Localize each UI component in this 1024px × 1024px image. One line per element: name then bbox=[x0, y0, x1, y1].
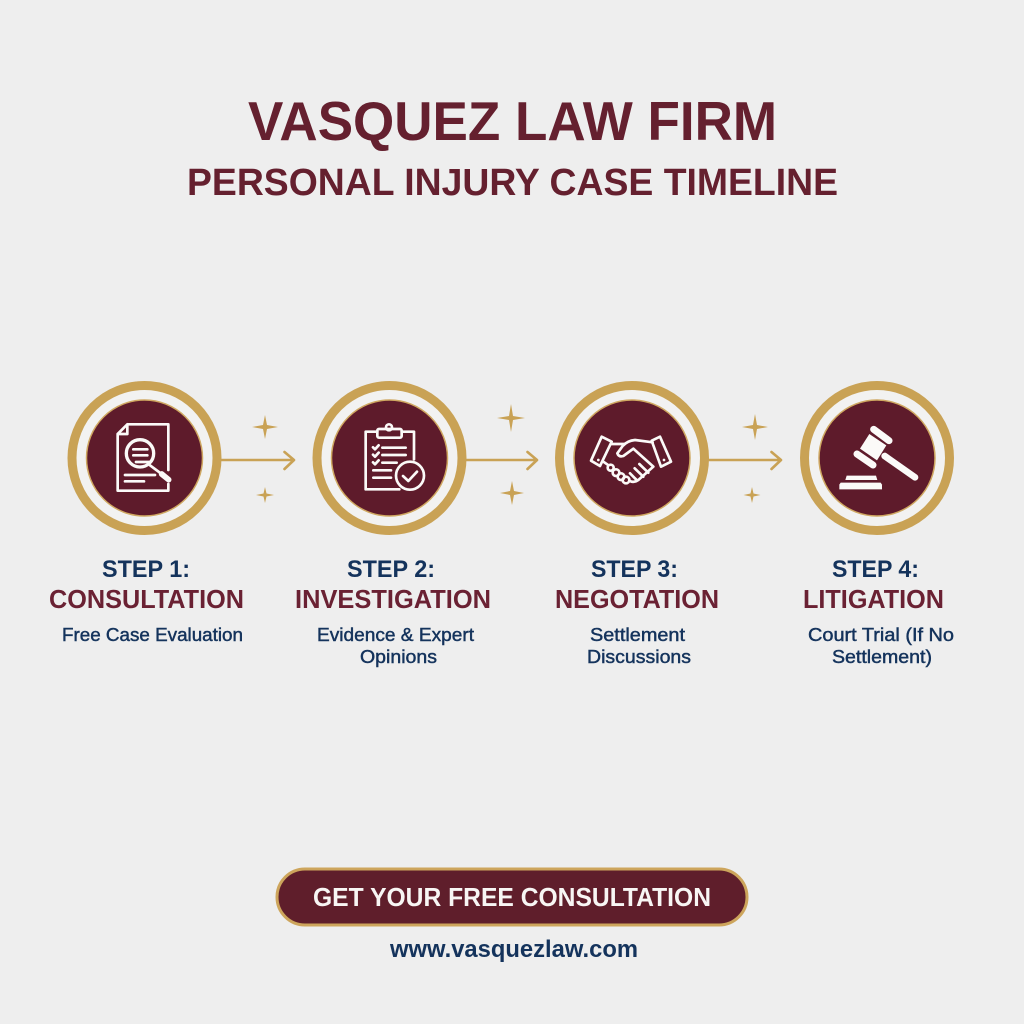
step 2 description: Evidence & Expert bbox=[317, 625, 474, 645]
step 2 disk bbox=[332, 400, 448, 516]
step 1 ring bbox=[72, 386, 217, 530]
icon: gavel bbox=[839, 429, 915, 489]
step 4 name: LITIGATION bbox=[803, 584, 944, 614]
step 3 description bbox=[587, 625, 691, 667]
sparkle 1 top bbox=[252, 415, 278, 439]
step 4 description: Settlement) bbox=[832, 647, 932, 667]
sparkle 2 bottom bbox=[500, 481, 524, 505]
step 3 disk bbox=[574, 400, 690, 516]
step 4 ring bbox=[804, 386, 950, 530]
step 4: litigation bbox=[803, 386, 954, 667]
step 1 label: STEP 1: bbox=[102, 556, 190, 583]
step 1 description: Free Case Evaluation bbox=[62, 625, 243, 645]
step 4 description: Court Trial (If No bbox=[808, 625, 954, 645]
icon: clipboard with checkmark bbox=[366, 424, 424, 490]
step 2: investigation bbox=[295, 386, 491, 667]
step 3 description: Discussions bbox=[587, 647, 691, 667]
step 2 ring bbox=[317, 386, 462, 530]
arrow 1 bbox=[221, 452, 294, 469]
arrow 3 bbox=[708, 452, 781, 469]
sparkle 2 top bbox=[497, 404, 525, 432]
step 3: negotiation bbox=[555, 386, 719, 667]
icon: handshake bbox=[591, 437, 671, 483]
step 3 ring bbox=[560, 386, 704, 530]
step 4 disk bbox=[819, 400, 935, 516]
step 1 name: CONSULTATION bbox=[49, 584, 244, 614]
step 3 label: STEP 3: bbox=[591, 556, 678, 583]
call-to-action button bbox=[277, 869, 747, 925]
subtitle: PERSONAL INJURY CASE TIMELINE bbox=[187, 162, 838, 204]
sparkle 1 bottom bbox=[256, 487, 274, 503]
step 1: consultation bbox=[49, 386, 244, 645]
step 2 name: INVESTIGATION bbox=[295, 584, 491, 614]
step 1 disk bbox=[86, 400, 202, 516]
icon: document with magnifying glass bbox=[118, 424, 169, 491]
step 3 name: NEGOTATION bbox=[555, 584, 719, 614]
call-to-action button: GET YOUR FREE CONSULTATION bbox=[313, 882, 711, 912]
step 4 description bbox=[808, 625, 954, 667]
arrow 2 bbox=[466, 452, 537, 469]
step 2 label: STEP 2: bbox=[347, 556, 435, 583]
title: VASQUEZ LAW FIRM bbox=[248, 90, 777, 152]
step 4 label: STEP 4: bbox=[832, 556, 919, 583]
step 3 description: Settlement bbox=[590, 625, 685, 645]
website url: www.vasquezlaw.com bbox=[389, 936, 638, 963]
step 2 description bbox=[317, 625, 474, 667]
step 2 description: Opinions bbox=[360, 647, 437, 667]
sparkle 3 bottom bbox=[744, 487, 760, 503]
sparkle 3 top bbox=[742, 414, 768, 440]
